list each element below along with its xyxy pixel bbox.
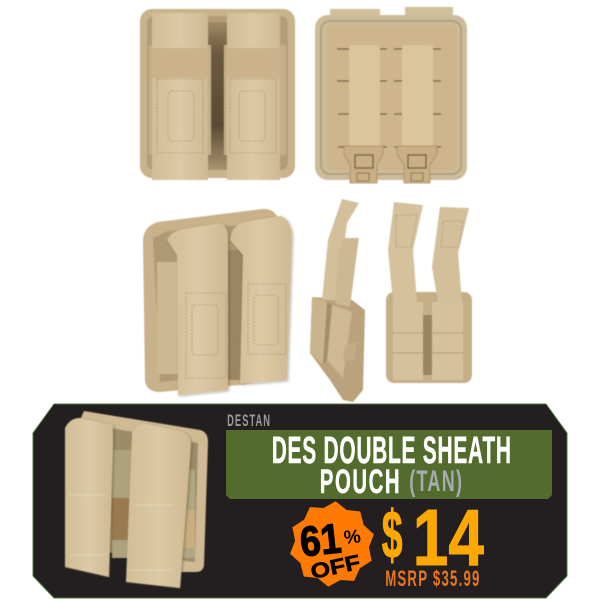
discount badge: % [343,526,362,549]
title text [272,430,511,500]
price: 14 [413,493,484,583]
photo: pouch angled view [143,209,292,395]
price [382,493,484,583]
photo: pouch in banner [65,411,208,588]
MSRP price: MSRP $35.99 [385,567,479,591]
title text: DES DOUBLE SHEATH [272,430,511,472]
photo: pouch inner view with open straps [386,202,472,383]
photo: pouch front view [140,9,295,180]
panel: product banner [33,404,567,598]
brand label: DESTAN [227,411,270,430]
discount badge: 61 [298,514,343,565]
title text: POUCH [320,463,400,500]
photo: pouch back view with clips [315,7,467,183]
title text: (TAN) [409,466,462,498]
green title bar [226,430,552,500]
price: $ [382,496,402,573]
discount badge: OFF [309,551,363,584]
photo: pouch side view with open straps [310,199,365,402]
discount badge [290,501,374,587]
